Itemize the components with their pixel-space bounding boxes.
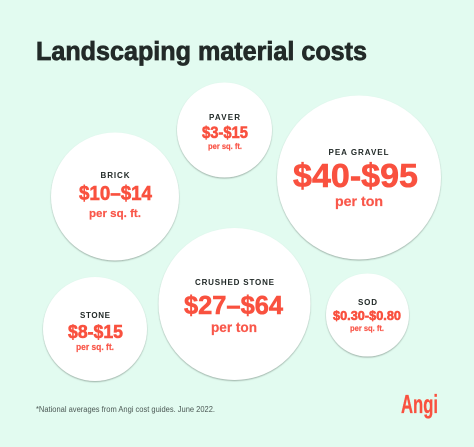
panel: paver: PAVER (209, 113, 240, 122)
title: Landscaping material costs (36, 38, 367, 66)
panel: brick (51, 132, 179, 260)
panel: stone: $8-$15 (68, 322, 123, 342)
footnote: *National averages from Angi cost guides. June 2022. (36, 405, 215, 414)
panel: pea gravel: per ton (335, 193, 383, 209)
panel: paver: per sq. ft. (208, 142, 242, 151)
panel: crushed stone: CRUSHED STONE (195, 278, 275, 287)
panel: sod (326, 274, 409, 356)
panel: crushed stone: per ton (211, 319, 257, 335)
panel: pea gravel (277, 96, 441, 260)
panel: stone: per sq. ft. (76, 342, 114, 352)
panel: brick: BRICK (100, 171, 130, 180)
panel: stone (43, 277, 147, 381)
panel: sod: SOD (358, 298, 377, 307)
panel: paver (177, 82, 272, 178)
panel: brick: per sq. ft. (89, 208, 141, 220)
panel: pea gravel: $40-$95 (293, 157, 418, 194)
logo: Angi: Angi (401, 389, 438, 419)
panel: sod: per sq. ft. (350, 324, 384, 333)
panel: paver: $3-$15 (202, 124, 248, 142)
panel: stone: STONE (80, 311, 111, 320)
panel: crushed stone (158, 228, 310, 380)
panel: sod: $0.30-$0.80 (333, 308, 401, 323)
panel: crushed stone: $27–$64 (184, 290, 284, 320)
panel: brick: $10–$14 (79, 183, 153, 205)
panel: pea gravel: PEA GRAVEL (328, 148, 389, 157)
